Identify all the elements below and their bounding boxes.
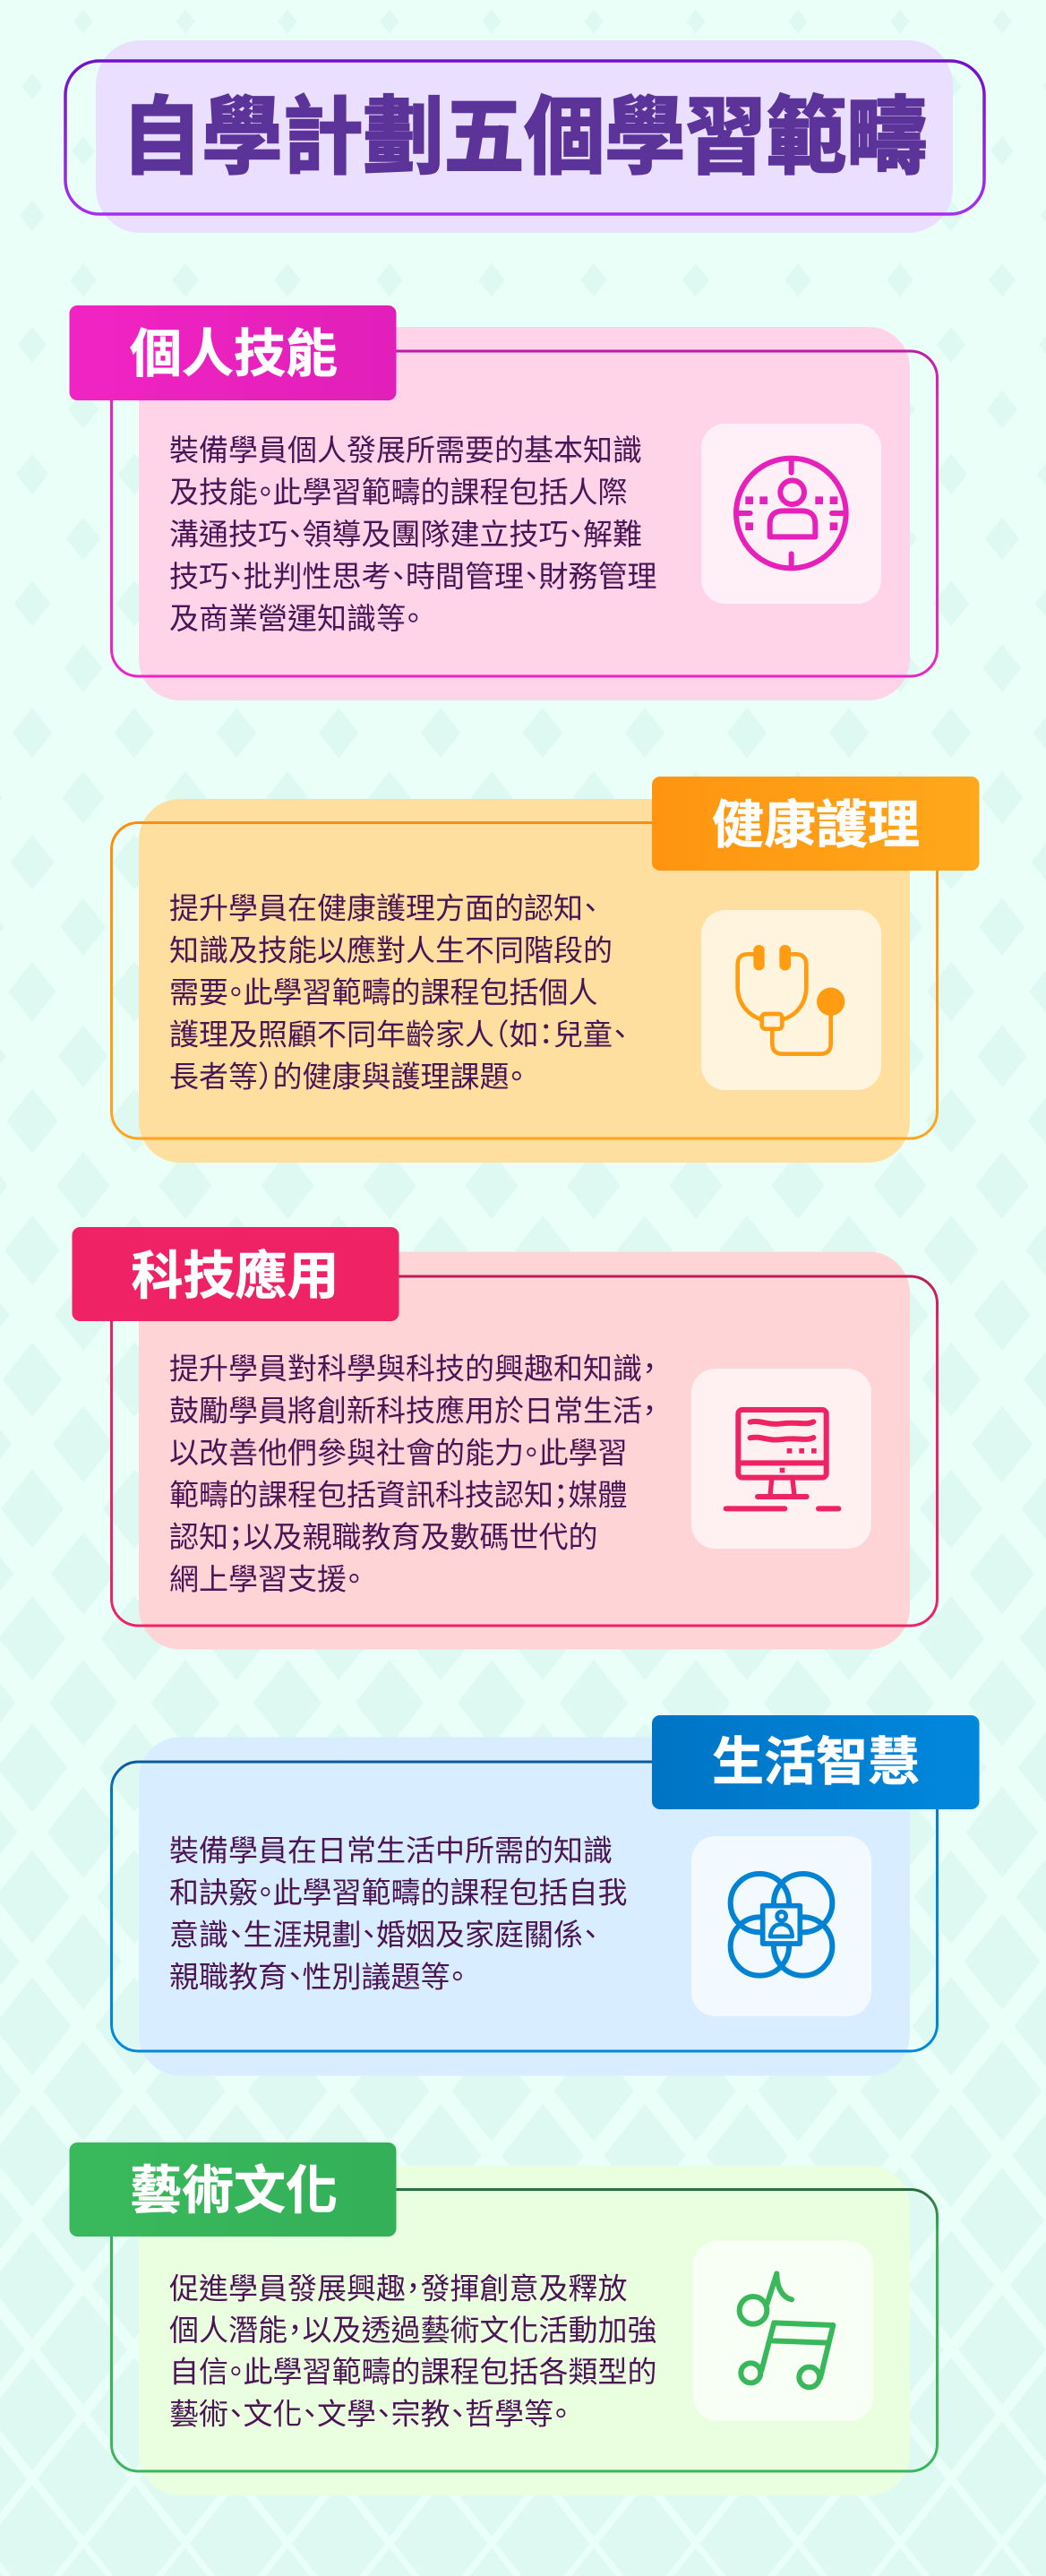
heading tag: technology applications: 科技應用	[131, 1247, 339, 1306]
icon: person in target	[701, 424, 881, 604]
text block: health care: 長者等）的健康與護理課題。	[169, 1060, 524, 1093]
heading tag: health care	[652, 777, 980, 871]
icon: desktop monitor	[691, 1369, 871, 1549]
heading tag: life wisdom	[652, 1715, 980, 1809]
text block: health care: 知識及技能以應對人生不同階段的	[169, 933, 613, 967]
text block: health care: 需要。此學習範疇的課程包括個人	[169, 976, 598, 1009]
icon: stethoscope	[701, 910, 881, 1090]
text block: arts and culture: 個人潛能，以及透過藝術文化活動加強	[169, 2314, 657, 2347]
text block: personal skills: 及技能。此學習範疇的課程包括人際	[169, 476, 627, 509]
panel: health care	[111, 777, 980, 1163]
text block: life wisdom: 裝備學員在日常生活中所需的知識	[169, 1834, 613, 1867]
text block: technology applications: 範疇的課程包括資訊科技認知；媒體	[169, 1478, 627, 1512]
text block: personal skills: 技巧、批判性思考、時間管理、財務管理	[169, 560, 657, 593]
title: 自學計劃五個學習範疇	[122, 89, 927, 185]
text block: personal skills: 及商業營運知識等。	[169, 602, 421, 635]
title banner	[65, 40, 984, 233]
heading tag: personal skills	[70, 305, 396, 400]
text block: arts and culture: 自信。此學習範疇的課程包括各類型的	[169, 2356, 657, 2388]
text block: technology applications: 鼓勵學員將創新科技應用於日常生活，	[169, 1394, 657, 1428]
panel: technology applications	[72, 1227, 937, 1650]
text block: life wisdom: 親職教育、性別議題等。	[169, 1960, 465, 1994]
text block: technology applications: 以改善他們參與社會的能力。此學習	[169, 1437, 627, 1469]
icon: music notes	[693, 2241, 873, 2421]
heading tag: personal skills: 個人技能	[130, 325, 338, 383]
text block: health care: 護理及照顧不同年齡家人（如：兒童、	[169, 1018, 627, 1052]
text block: personal skills: 溝通技巧、領導及團隊建立技巧、解難	[169, 518, 642, 551]
heading tag: arts and culture: 藝術文化	[130, 2162, 338, 2220]
panel: life wisdom	[111, 1715, 980, 2076]
text block: arts and culture: 藝術、文化、文學、宗教、哲學等。	[169, 2397, 568, 2431]
panel: arts and culture	[70, 2142, 937, 2495]
text block: personal skills: 裝備學員個人發展所需要的基本知識	[169, 434, 642, 467]
text block: technology applications: 認知；以及親職教育及數碼世代的	[169, 1521, 598, 1553]
heading tag: arts and culture	[70, 2142, 396, 2237]
text block: arts and culture: 促進學員發展興趣，發揮創意及釋放	[169, 2271, 627, 2306]
text block: technology applications: 提升學員對科學與科技的興趣和知識，	[169, 1352, 657, 1385]
icon: overlapping circles with person	[691, 1836, 871, 2016]
heading tag: life wisdom: 生活智慧	[712, 1733, 920, 1791]
panel: personal skills	[70, 305, 937, 700]
text block: life wisdom: 意識、生涯規劃、婚姻及家庭關係、	[169, 1919, 598, 1951]
text block: life wisdom: 和訣竅。此學習範疇的課程包括自我	[169, 1876, 627, 1910]
text block: technology applications: 網上學習支援。	[169, 1562, 362, 1596]
text block: health care: 提升學員在健康護理方面的認知、	[169, 892, 598, 924]
heading tag: health care: 健康護理	[712, 796, 920, 854]
heading tag: technology applications	[72, 1227, 399, 1321]
